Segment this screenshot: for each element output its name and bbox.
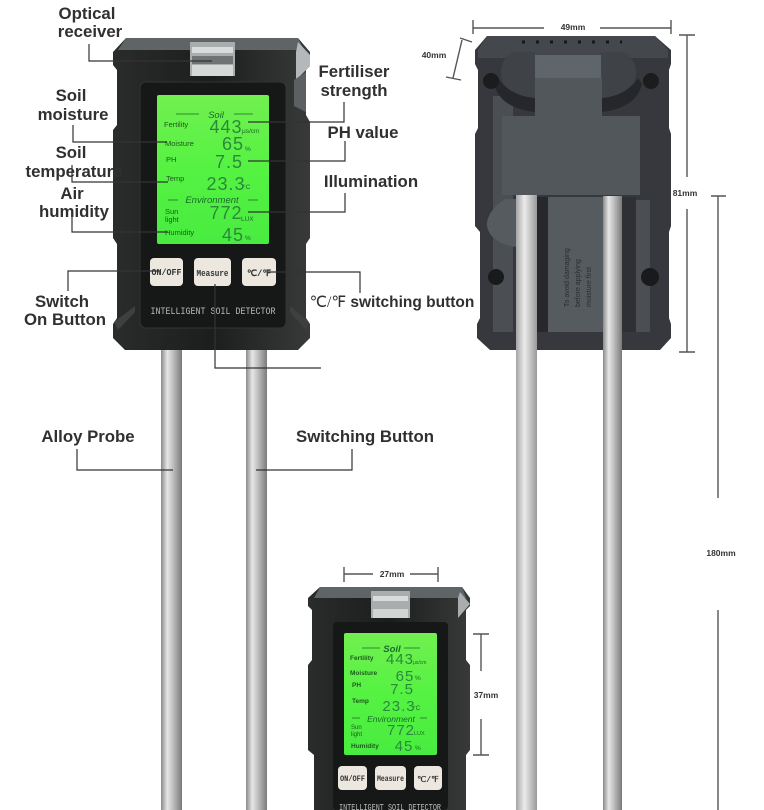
small LCD screen xyxy=(344,633,437,755)
small LCD screen: 772 xyxy=(387,722,415,739)
small LCD screen: Temp xyxy=(352,698,369,705)
optical receiver window xyxy=(190,42,235,76)
dimension: 27mm: 27mm xyxy=(380,569,405,579)
dimension: 49mm: 49mm xyxy=(561,22,586,32)
callout: air humidity: humidity xyxy=(39,202,110,221)
LCD screen: light xyxy=(165,215,180,224)
small LCD screen: LUX xyxy=(414,731,425,737)
callout: PH value: PH value xyxy=(328,123,398,142)
callout: alloy probe xyxy=(41,427,173,470)
LCD screen: 7.5 xyxy=(215,152,243,172)
device body xyxy=(113,38,310,350)
callout: switching button: Switching Button xyxy=(296,427,434,446)
small buttons: Measure xyxy=(377,775,404,784)
callout: switch on button: On Button xyxy=(24,310,106,329)
LCD screen xyxy=(157,95,269,245)
probes: front device xyxy=(161,350,267,810)
device: front view xyxy=(113,38,310,350)
back body xyxy=(475,36,671,350)
dimension: 37mm: 37mm xyxy=(474,690,499,700)
callout: soil temperature: temperature xyxy=(26,162,122,181)
callout: soil moisture xyxy=(38,86,167,142)
dimension: 81mm: 81mm xyxy=(673,188,698,198)
LCD screen: % xyxy=(245,235,251,242)
small LCD screen: Fertility xyxy=(350,655,374,662)
small LCD screen: μs/cm xyxy=(413,660,426,666)
small LCD screen: % xyxy=(415,745,421,752)
LCD screen: Temp xyxy=(166,174,184,183)
callout: fertiliser strength: Fertiliser xyxy=(319,62,390,81)
buttons: ℃/℉ xyxy=(247,268,271,279)
device: small front view xyxy=(308,587,470,810)
LCD screen: 772 xyxy=(209,203,243,223)
LCD screen: °C xyxy=(243,183,251,191)
callout: soil moisture: moisture xyxy=(38,105,108,124)
small LCD screen: Soil xyxy=(383,644,401,655)
callout: switching button xyxy=(256,427,434,470)
small LCD screen: Environment xyxy=(367,714,415,724)
LCD screen: 23.3 xyxy=(206,174,246,194)
callout: fertiliser strength xyxy=(248,62,390,122)
LCD screen: 45 xyxy=(222,225,244,245)
label plate: To avoid damaging xyxy=(564,248,571,307)
dimension: 180mm: 180mm xyxy=(706,548,736,558)
callout: illumination xyxy=(248,172,418,212)
bracket plate xyxy=(502,78,640,195)
buttons: ON/OFF xyxy=(152,268,182,278)
small LCD screen: Sun xyxy=(351,725,362,731)
LCD screen: 65 xyxy=(222,134,244,154)
small LCD screen: light xyxy=(351,732,362,738)
small LCD screen: 443 xyxy=(386,651,414,668)
LCD screen: 443 xyxy=(209,117,243,137)
small buttons: ℃/℉ xyxy=(417,775,439,785)
callout: temperature unit switching button: ℃/℉ switching button xyxy=(310,294,474,311)
callout: illumination: Illumination xyxy=(324,172,418,191)
small LCD screen: PH xyxy=(352,682,361,689)
probes: back device xyxy=(516,195,622,810)
callout: optical receiver xyxy=(58,4,212,61)
callout: optical receiver: receiver xyxy=(58,22,123,41)
callout: soil moisture: Soil xyxy=(56,86,86,105)
LCD screen: LUX xyxy=(241,216,254,223)
buttons: Measure xyxy=(196,269,228,279)
LCD screen: % xyxy=(245,146,251,153)
dimension: 40mm xyxy=(422,38,472,80)
LCD screen: Moisture xyxy=(165,139,194,148)
LCD screen: PH xyxy=(166,155,176,164)
small LCD screen: °C xyxy=(413,704,421,712)
callout: soil temperature: Soil xyxy=(56,143,86,162)
label plate: before applying xyxy=(575,259,582,307)
dimension: 37mm xyxy=(473,634,499,755)
dimension: 180mm xyxy=(706,196,736,810)
label plate xyxy=(536,197,636,332)
device: back view xyxy=(475,36,671,350)
small LCD screen: Humidity xyxy=(351,743,379,750)
callout: air humidity: Air xyxy=(60,184,84,203)
side knob xyxy=(487,199,516,247)
LCD screen: Fertility xyxy=(164,120,188,129)
small LCD screen: 23.3 xyxy=(382,698,416,715)
dimension: 40mm: 40mm xyxy=(422,50,447,60)
dimension: 27mm xyxy=(344,567,438,582)
callout: optical receiver: Optical xyxy=(59,4,115,23)
callout: switch on button: Switch xyxy=(35,292,89,311)
callout: switch on button xyxy=(24,271,160,329)
callout: air humidity xyxy=(39,184,168,232)
LCD screen: Humidity xyxy=(165,228,194,237)
small LCD screen: % xyxy=(415,675,421,682)
callout: fertiliser strength: strength xyxy=(320,81,388,100)
vent holes xyxy=(522,40,622,44)
buttons xyxy=(150,258,276,286)
small buttons: ON/OFF xyxy=(340,775,365,784)
small LCD screen: 65 xyxy=(396,668,414,685)
small LCD screen: 45 xyxy=(395,738,413,755)
small LCD screen: 7.5 xyxy=(390,681,414,698)
small optical window xyxy=(371,591,410,618)
small LCD screen: Moisture xyxy=(350,670,377,677)
label plate: moisture first xyxy=(586,267,593,307)
callout: PH value xyxy=(248,123,398,161)
LCD screen: Sun xyxy=(165,207,178,216)
LCD screen: Soil xyxy=(208,110,225,121)
LCD screen: Environment xyxy=(185,195,239,206)
LCD screen: μs/cm xyxy=(242,128,259,135)
small buttons xyxy=(338,766,442,790)
device name: INTELLIGENT SOIL DETECTOR xyxy=(150,307,276,318)
bracket hinge xyxy=(483,52,659,112)
small body xyxy=(308,587,470,810)
callout: temperature unit switching button xyxy=(268,272,474,311)
dimension: 49mm xyxy=(473,20,671,34)
callout: alloy probe: Alloy Probe xyxy=(41,427,135,446)
dimension: 81mm xyxy=(673,35,698,352)
callout: measure line xyxy=(215,284,321,368)
callout: soil temperature xyxy=(26,143,168,182)
